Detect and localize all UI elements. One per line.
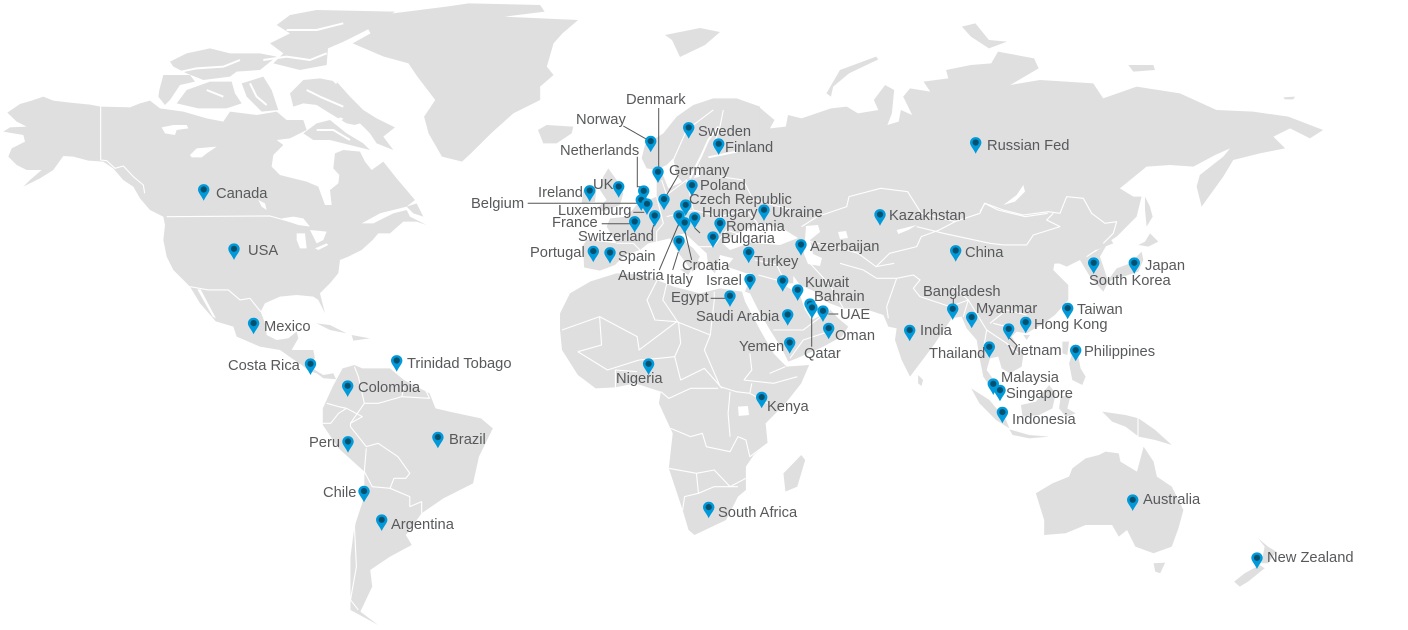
landmass: Korea and Japan (1055, 65, 1295, 292)
marker: Switzerland (578, 210, 660, 245)
marker: Romania: Romania (726, 219, 786, 235)
marker: Spain (604, 247, 656, 265)
marker: Canada (198, 184, 268, 202)
marker: Israel (706, 273, 756, 290)
marker: Colombia: Colombia (358, 380, 421, 396)
lake: Balkhash (897, 225, 917, 234)
marker: Hungary: Hungary (702, 205, 758, 221)
marker: Japan (1129, 257, 1185, 274)
map: Baltic channels (690, 127, 737, 178)
borders: South America (323, 277, 797, 610)
marker: Taiwan (1062, 302, 1123, 319)
marker: Switzerland: Switzerland (578, 229, 654, 245)
marker: Kenya (756, 392, 809, 415)
marker: Czech Republic (680, 192, 792, 216)
marker: India (904, 323, 953, 341)
marker: Egypt (671, 290, 736, 307)
map: country borders (101, 107, 1138, 610)
marker: UK: UK (593, 177, 614, 193)
marker: Trinidad Tobago: Trinidad Tobago (407, 356, 512, 372)
borders: North America (101, 107, 290, 312)
landmass: Baffin Island (290, 78, 395, 150)
landmass: Greenland (353, 3, 578, 162)
landmass: Caribbean islands (317, 323, 370, 341)
marker: Yemen: Yemen (739, 339, 784, 355)
marker: Netherlands (560, 143, 649, 202)
landmass: Svalbard (665, 28, 720, 57)
marker: Poland: Poland (700, 178, 746, 194)
marker: China (950, 245, 1004, 262)
map: landmasses (3, 3, 1323, 393)
marker: Czech Republic: Czech Republic (689, 192, 792, 208)
marker: Indonesia: Indonesia (1012, 412, 1077, 428)
landmass: Sakhalin (1145, 197, 1153, 227)
marker: China: China (965, 245, 1004, 261)
marker: Mexico (248, 318, 311, 335)
marker: France: France (552, 215, 598, 231)
landmass: Honshu (1103, 252, 1143, 287)
marker: Kuwait: Kuwait (805, 275, 849, 291)
marker: Malaysia: Malaysia (1001, 370, 1060, 386)
landmass: Siberia and northern Asia (700, 23, 1323, 267)
marker: Bahrain: Bahrain (814, 289, 865, 305)
landmass: Hainan (1023, 335, 1030, 340)
marker: Taiwan: Taiwan (1077, 302, 1123, 318)
marker: Luxemburg (558, 198, 653, 219)
marker: South Korea: South Korea (1089, 273, 1171, 289)
marker: Peru (309, 435, 354, 453)
borders: Central and East Asia (802, 188, 1048, 267)
map: southern landmasses (317, 237, 1276, 625)
marker: Myanmar (966, 301, 1037, 328)
marker: UAE (817, 305, 870, 323)
marker: Saudi Arabia: Saudi Arabia (696, 309, 780, 325)
marker: Egypt: Egypt (671, 290, 709, 306)
marker: Denmark (626, 92, 686, 183)
landmass: Southampton area (303, 120, 370, 150)
landmass: South America (323, 365, 493, 625)
marker: Brazil (432, 432, 486, 448)
marker: Netherlands: Netherlands (560, 143, 639, 159)
sea: Black Sea (722, 223, 798, 250)
sea: Gulf of California (197, 289, 216, 318)
marker: Nigeria (616, 358, 663, 387)
landmass: Novaya Zemlya (826, 57, 878, 97)
landmasses: Australasia and maritime Asia (918, 342, 1276, 587)
borders: Europe (617, 110, 793, 250)
landmass: Scandinavia (538, 98, 793, 283)
marker: Vietnam: Vietnam (1008, 343, 1062, 359)
marker: Philippines: Philippines (1084, 344, 1155, 360)
landmass: Madagascar (783, 455, 805, 492)
marker: Hungary (689, 205, 758, 229)
marker: Chile (323, 485, 370, 502)
marker: France (552, 215, 640, 233)
marker: Turkey: Turkey (754, 254, 799, 270)
lake: Aral (838, 231, 848, 239)
landmass: Africa (323, 273, 809, 625)
marker: Poland (686, 178, 746, 196)
marker: Oman (823, 323, 875, 344)
sea: Caspian (804, 225, 822, 266)
marker: USA: USA (248, 243, 278, 259)
marker: Croatia (679, 217, 730, 274)
marker: Austria: Austria (618, 268, 665, 284)
marker: Azerbaijan: Azerbaijan (810, 239, 879, 255)
marker: Italy (666, 235, 694, 288)
marker: Russian Fed: Russian Fed (987, 138, 1069, 154)
marker: Qatar (804, 302, 841, 362)
marker: Australia (1127, 492, 1201, 511)
borders: Middle East (755, 260, 833, 358)
marker: Belgium (471, 194, 647, 212)
landmass: New Siberian Islands (1128, 65, 1155, 72)
marker: Argentina (376, 514, 455, 533)
lakes: Canada and Great Lakes (162, 117, 365, 250)
marker: Norway (576, 112, 656, 152)
location markers and labels (198, 92, 1354, 569)
marker: Ukraine: Ukraine (772, 205, 823, 221)
marker: Kuwait (792, 275, 849, 301)
marker: Thailand (929, 341, 995, 362)
marker: Kenya: Kenya (767, 399, 809, 415)
marker: Indonesia (997, 407, 1077, 428)
marker: Germany (658, 163, 730, 210)
marker: Costa Rica: Costa Rica (228, 358, 301, 374)
marker: Argentina: Argentina (391, 517, 455, 533)
landmass: Ireland (582, 187, 597, 203)
map: seas and lakes (162, 117, 1025, 319)
marker: Croatia: Croatia (682, 258, 730, 274)
marker: Singapore: Singapore (1006, 386, 1073, 402)
marker: UK (593, 177, 624, 198)
marker: Canada: Canada (216, 186, 268, 202)
marker: USA (228, 243, 278, 260)
sea: Persian Gulf (787, 287, 823, 319)
marker: Denmark: Denmark (626, 92, 686, 108)
marker: Hong Kong: Hong Kong (1034, 317, 1108, 333)
marker: Bulgaria: Bulgaria (721, 231, 776, 247)
marker: Nigeria: Nigeria (616, 371, 663, 387)
marker: Australia: Australia (1143, 492, 1201, 508)
landmass: Queen Elizabeth Islands (170, 48, 277, 80)
marker: South Africa: South Africa (718, 505, 798, 521)
marker: Myanmar: Myanmar (976, 301, 1037, 317)
marker: India: India (920, 323, 953, 339)
lake: Baikal (1003, 185, 1025, 205)
landmass: central arctic island (242, 77, 278, 112)
landmass: Severnaya Zemlya (962, 23, 1007, 48)
marker: Luxemburg: Luxemburg (558, 203, 631, 219)
marker: Qatar: Qatar (804, 346, 841, 362)
marker: Finland: Finland (725, 140, 773, 156)
marker: Germany: Germany (669, 163, 730, 179)
marker: Malaysia (988, 370, 1060, 395)
marker: Mexico: Mexico (264, 319, 311, 335)
marker: Japan: Japan (1145, 258, 1185, 274)
landmass: Iceland (538, 125, 573, 143)
marker: South Africa (703, 502, 798, 521)
marker: Ireland: Ireland (538, 185, 583, 201)
landmass: Ellesmere Island (270, 10, 395, 70)
marker: Vietnam (1003, 323, 1062, 359)
borders: New Guinea (1137, 417, 1139, 438)
marker: Iraq area (777, 275, 788, 292)
landmass: Arabian Peninsula and Levant (745, 260, 848, 362)
landmass: Italy (670, 237, 702, 275)
landmass: South and East Asia (787, 200, 1113, 393)
marker: Bahrain (804, 289, 865, 315)
sea: Mediterranean (580, 233, 760, 293)
marker: Turkey (743, 247, 799, 270)
landmass: Banks Island (158, 75, 195, 105)
marker: Chile: Chile (323, 485, 356, 501)
leader lines (528, 108, 1017, 347)
marker: UAE: UAE (840, 307, 870, 323)
landmass: Alaska (3, 97, 173, 218)
marker: Norway: Norway (576, 112, 626, 128)
marker: Thailand: Thailand (929, 346, 985, 362)
marker: Belgium: Belgium (471, 196, 524, 212)
marker: South Korea (1088, 257, 1171, 289)
marker: Israel: Israel (706, 273, 742, 289)
landmass: North and Central America (101, 10, 427, 379)
marker: Peru: Peru (309, 435, 340, 451)
landmass: Hokkaido (1138, 233, 1158, 247)
borders: South and Southeast Asia (810, 263, 1027, 355)
marker: Austria (618, 210, 685, 284)
marker: Portugal: Portugal (530, 245, 585, 261)
landmass: Newfoundland (407, 203, 423, 217)
marker: Bangladesh (923, 284, 1001, 320)
lake: Victoria (738, 406, 749, 416)
landmass: Wrangel Island (1283, 97, 1295, 99)
borders: Africa (562, 292, 714, 350)
marker: Kazakhstan: Kazakhstan (889, 208, 966, 224)
landmass: continental Europe (583, 147, 793, 283)
marker: New Zealand: New Zealand (1267, 550, 1354, 566)
landmass: Great Britain (597, 168, 623, 212)
marker: Spain: Spain (618, 249, 656, 265)
map: arctic channels (173, 23, 350, 140)
marker: Sweden (683, 122, 751, 140)
marker: Italy: Italy (666, 272, 694, 288)
marker: Bangladesh: Bangladesh (923, 284, 1001, 300)
landmass: Victoria Island (177, 82, 242, 108)
marker: Brazil: Brazil (449, 432, 486, 448)
marker: Sweden: Sweden (698, 124, 751, 140)
marker: Oman: Oman (835, 328, 875, 344)
